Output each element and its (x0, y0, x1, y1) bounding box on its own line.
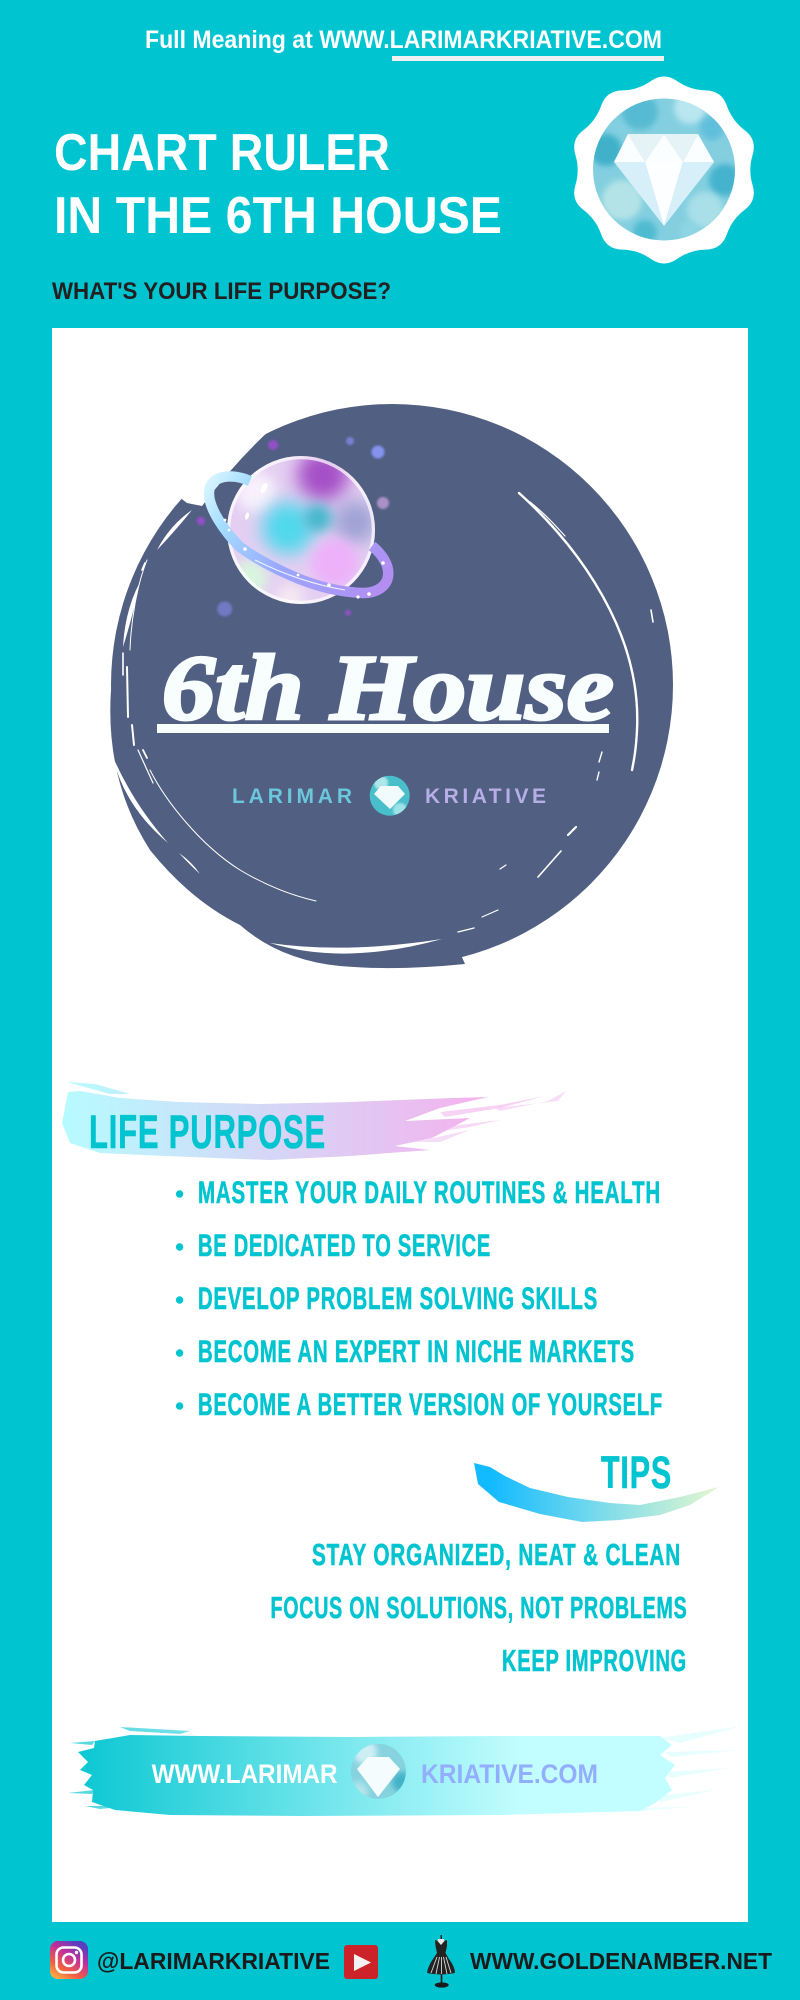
website banner (68, 1726, 742, 1816)
underline (157, 724, 609, 733)
6th house brush circle logo (110, 404, 673, 968)
instagram handle: @LARIMARKRIATIVE (97, 1948, 330, 1974)
banner gem (351, 1744, 406, 1799)
brush strokes (113, 405, 442, 954)
stars around planet (197, 437, 389, 616)
tips text (270, 1538, 688, 1678)
panel: white content (52, 328, 748, 1922)
banner text left: WWW.LARIMAR (152, 1759, 338, 1789)
website: WWW.GOLDENAMBER.NET (470, 1948, 772, 1974)
title (54, 124, 502, 245)
title: IN THE 6TH HOUSE (54, 187, 502, 245)
tips text: KEEP IMPROVING (502, 1644, 687, 1678)
brush: life purpose (62, 1082, 566, 1160)
planet sphere (227, 456, 375, 604)
icon: instagram (50, 1941, 88, 1979)
6th House script: 6th House (162, 637, 614, 740)
icon: dress mannequin (427, 1935, 455, 1988)
top link line: Full Meaning at WWW.LARIMARKRIATIVE.COM (145, 26, 662, 54)
icon: larimar diamond badge (574, 77, 754, 263)
tips section (270, 1447, 719, 1678)
footer (50, 1935, 772, 1988)
subtitle: WHAT'S YOUR LIFE PURPOSE? (52, 278, 391, 305)
title: CHART RULER (54, 124, 390, 182)
brush: banner (68, 1727, 675, 1816)
heading: TIPS (601, 1447, 672, 1498)
planet ring (209, 476, 388, 599)
heading: LIFE PURPOSE (89, 1106, 326, 1159)
bullet list (176, 1174, 663, 1422)
brush: tips (474, 1463, 719, 1522)
bullet list: BE DEDICATED TO SERVICE (198, 1227, 491, 1263)
brand: Larimar: LARIMAR (232, 785, 352, 808)
brush circle (110, 404, 673, 968)
banner text right: KRIATIVE.COM (421, 1759, 598, 1789)
icon: youtube (344, 1945, 378, 1979)
life purpose section (62, 1082, 663, 1422)
brand: Kriative: KRIATIVE (425, 785, 546, 808)
brand gem (370, 776, 410, 817)
